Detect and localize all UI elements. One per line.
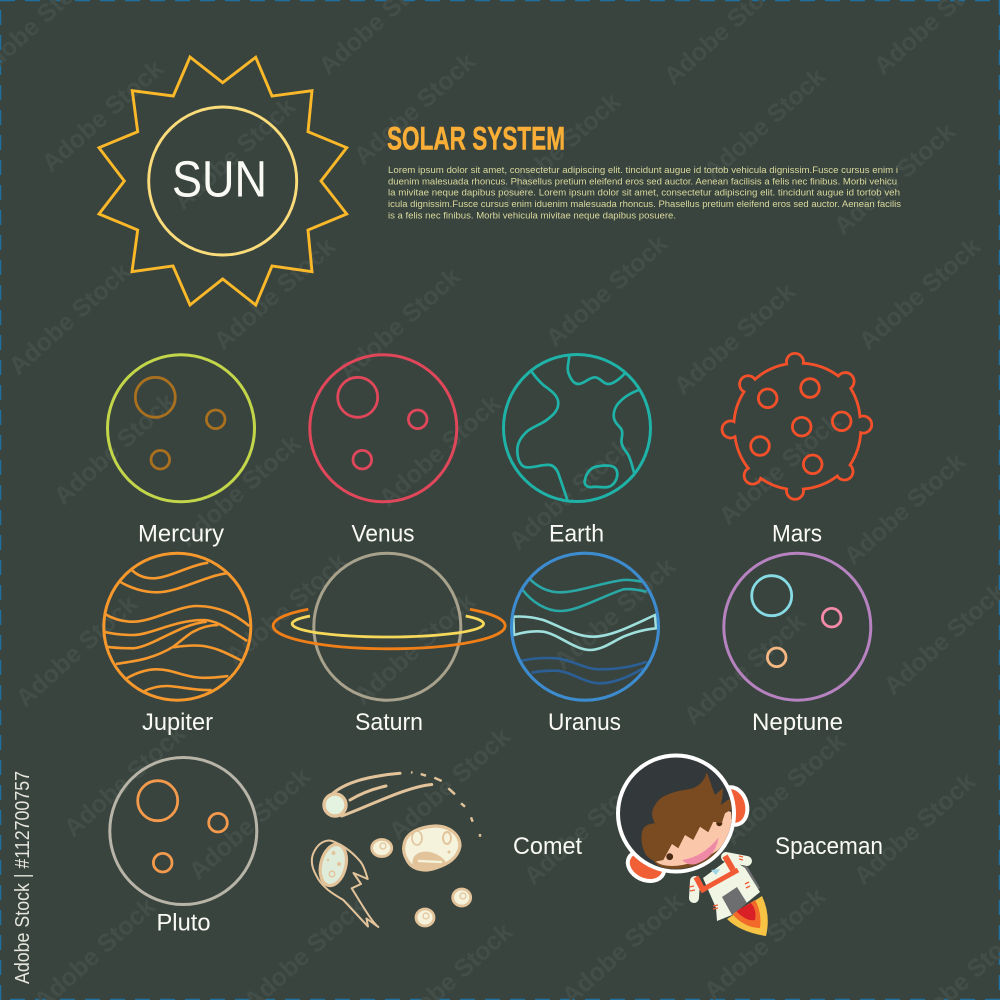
text: Adobe Stock: [669, 277, 801, 401]
label: Venus: Venus: [352, 521, 414, 548]
planet: Pluto: [110, 758, 257, 904]
label: Pluto: Pluto: [156, 910, 210, 937]
planet: Jupiter: [104, 553, 251, 700]
label: Earth: Earth: [549, 521, 604, 548]
label: Mars: Mars: [772, 521, 822, 548]
text block: description: [388, 165, 902, 220]
text block: description: la mivitae neque dapibus posuere. Lorem ipsum dolor sit amet, consectetur adipiscing elit. tincidunt augue id tortob veh: [388, 188, 900, 198]
text block: description: is a felis nec finibus. Morbi vehicula mivitae neque dapibus posuere.: [388, 210, 676, 220]
sun label: SUN: [172, 151, 267, 208]
text: Adobe Stock: [174, 429, 306, 553]
label: Neptune: Neptune: [752, 709, 843, 736]
comet with tail: [324, 772, 480, 837]
text: Adobe Stock: [169, 92, 301, 216]
outer ring: [273, 609, 505, 649]
small asteroid: [372, 840, 392, 856]
text block: description: Lorem ipsum dolor sit amet, consectetur adipiscing elit. tincidunt augue id tortob vehicula dignissim.Fusce cursus enim i: [388, 165, 898, 175]
text: Adobe Stock: [549, 552, 681, 676]
inner ring: [292, 616, 484, 637]
text: Adobe Stock: [719, 727, 851, 851]
planet: Uranus: [512, 553, 658, 700]
title: SOLAR SYSTEM: [387, 120, 565, 156]
text: Adobe Stock: [541, 229, 673, 353]
text: Adobe Stock: [519, 767, 651, 891]
head: [641, 772, 733, 869]
text: Adobe Stock: [854, 232, 986, 356]
label: Comet: Comet: [513, 833, 582, 860]
text: Adobe Stock: [221, 547, 353, 671]
text: Adobe Stock: [334, 262, 466, 386]
text: Adobe Stock: [714, 407, 846, 531]
label: Mercury: Mercury: [138, 521, 224, 548]
small asteroid: [453, 889, 471, 906]
planet: Mars: [722, 353, 872, 499]
label: Spaceman: Spaceman: [775, 833, 883, 860]
label: Saturn: Saturn: [355, 709, 423, 736]
helmet: [618, 756, 734, 872]
sun disc: [149, 107, 297, 255]
icon: comets and asteroids: [312, 772, 480, 927]
large asteroid: [404, 826, 460, 870]
text: Adobe Stock: [504, 432, 636, 556]
text: Adobe Stock: [829, 117, 961, 241]
text: Adobe Stock: [494, 87, 626, 211]
icon: spaceman: [618, 756, 768, 936]
text: Adobe Stock: [49, 387, 181, 511]
comet outline: [312, 840, 378, 927]
helmet ears: [620, 782, 754, 889]
text: Adobe Stock: [4, 257, 136, 381]
label: Jupiter: Jupiter: [142, 709, 213, 736]
text: Adobe Stock: [209, 232, 341, 356]
sun rays: [99, 57, 347, 305]
text: Adobe Stock: [349, 587, 481, 711]
text: Adobe Stock: [59, 719, 191, 843]
text: Adobe Stock: [374, 389, 506, 513]
text: Adobe Stock: [384, 722, 516, 846]
text: Adobe Stock: [699, 62, 831, 186]
planet: Earth: [504, 354, 650, 502]
rocket flame: [727, 896, 768, 936]
label: Uranus: Uranus: [548, 709, 621, 736]
icon: sun: [99, 57, 347, 305]
text block: description: duenim malesuada rhoncus. Phasellus pretium eleifend eros sed auctor. Aenean facilisis a felis nec finibus. Morbi vehicu: [388, 176, 897, 186]
small asteroid: [416, 909, 434, 926]
planet: Neptune: [724, 553, 871, 700]
text: Adobe Stock: [11, 589, 143, 713]
text: Adobe Stock: [349, 47, 481, 171]
text: Adobe Stock: [849, 767, 981, 891]
text block: description: icula dignissim.Fusce cursus enim iduenim malesuada rhoncus. Phasellus pretium eleifend eros sed auctor. Aenean facilis: [388, 199, 902, 209]
stock id text: Adobe Stock | #112700757: [12, 771, 34, 984]
text: Adobe Stock: [679, 607, 811, 731]
text: Adobe Stock: [37, 54, 169, 178]
planet: Mercury: [108, 355, 254, 502]
planet: Venus: [310, 355, 457, 502]
text: Adobe Stock: [184, 762, 316, 886]
suit: [689, 856, 760, 921]
text: Adobe Stock: [839, 447, 971, 571]
planet: Saturn: [273, 553, 505, 700]
